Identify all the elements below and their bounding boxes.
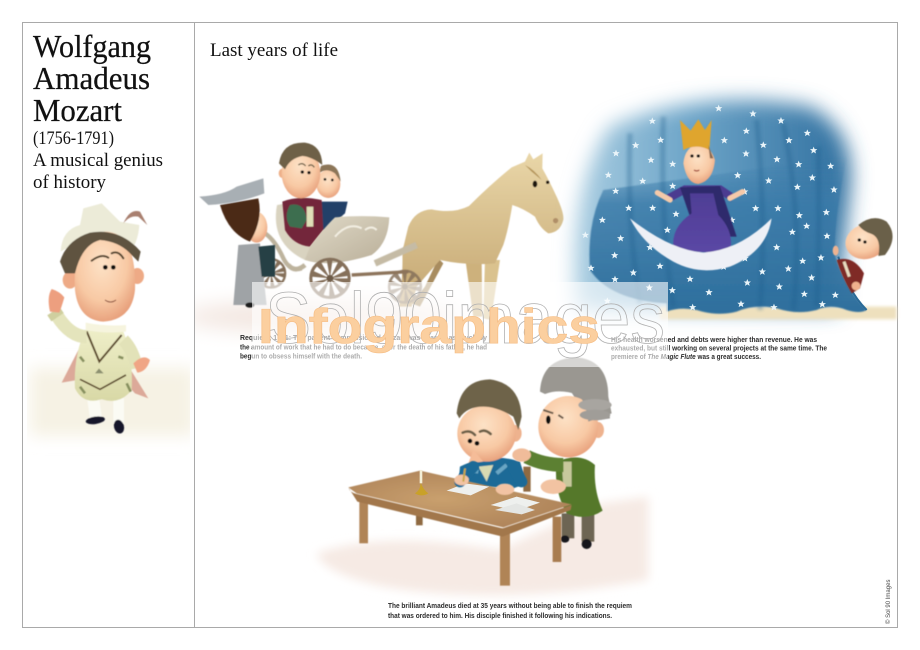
- subtitle: A musical genius: [33, 150, 163, 171]
- caption: health and debts: exhausted, but still working on several projects at the same time. The: [611, 346, 827, 352]
- caption: requiem: begun to obsess himself with the death.: [240, 354, 362, 360]
- horse: [399, 153, 563, 320]
- Amadeus upper body: [457, 379, 531, 492]
- section heading: Last years of life: [210, 40, 338, 61]
- illustration: Mozart with disciple at table: [317, 357, 648, 595]
- subtitle: of history: [33, 172, 106, 193]
- title: [33, 28, 151, 128]
- caption: requiem: Requiem, 1791: The patient commissioned Mozart was scared, as much by: [240, 335, 487, 342]
- caption: health and debts: His health worsened and debts were higher than revenue. He was: [611, 337, 817, 344]
- servant: [199, 178, 275, 308]
- subtitle: (1756-1791): [33, 128, 114, 149]
- title: Mozart: [33, 92, 122, 128]
- watermark: Infographics: Infographics: [258, 300, 600, 354]
- watermark band: [252, 282, 668, 367]
- subtitle: [33, 128, 163, 193]
- passengers: [279, 143, 348, 247]
- caption: requiem: [240, 335, 487, 360]
- caption: death of Amadeus: [388, 603, 632, 620]
- table: [348, 471, 572, 586]
- title: Wolfgang: [33, 28, 151, 64]
- illustration: carriage with horse: [182, 143, 563, 333]
- caption: requiem: the amount of work that he had to do because, after the death of his father, he had: [240, 344, 487, 352]
- curtain: [575, 100, 897, 319]
- boy peeking: [833, 218, 893, 293]
- disciple: [538, 357, 612, 549]
- caption: death of Amadeus: that was ordered to him. His disciple finished it following his indications.: [388, 613, 612, 620]
- title: Amadeus: [33, 60, 150, 96]
- caption: health and debts: premiere of The Magic Flute was a great success.: [611, 354, 761, 361]
- stars: [582, 105, 839, 310]
- watermark: Sol90images: Sol90images: [265, 279, 665, 359]
- caption: health and debts: [611, 337, 827, 361]
- illustration: queen of the night on curtain stage: [575, 100, 897, 319]
- credit: © Sol 90 Images: [885, 580, 892, 624]
- illustration: Mozart portrait: [30, 203, 195, 436]
- hands and sleeves over table: [454, 448, 566, 495]
- carriage front panel: [305, 216, 389, 297]
- carriage: [257, 202, 421, 302]
- queen: [630, 119, 772, 270]
- caption: death of Amadeus: The brilliant Amadeus died at 35 years without being able to finish the requiem: [388, 603, 632, 610]
- paper sheets and candle: [415, 470, 540, 514]
